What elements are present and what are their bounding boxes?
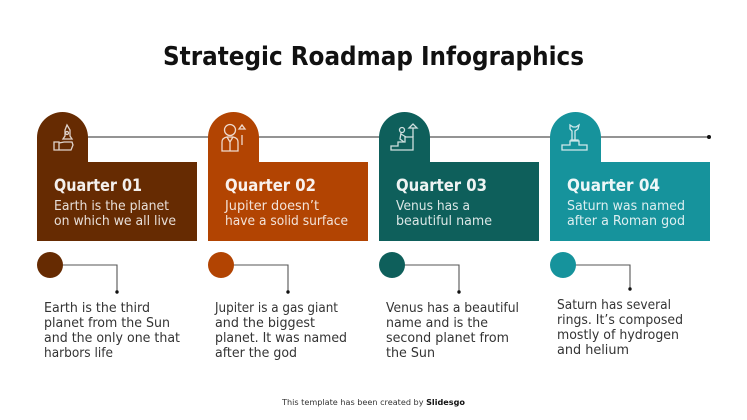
text block: jupiter: and the biggest [215, 315, 315, 331]
description: Earth is the planet [54, 198, 169, 214]
text block: earth: harbors life [44, 345, 113, 361]
description: after a Roman god [567, 213, 685, 229]
text block: saturn: mostly of hydrogen [557, 327, 679, 343]
text block: jupiter: Jupiter is a gas giant [214, 300, 338, 316]
description: have a solid surface [225, 213, 348, 229]
connector: quarter 04 [550, 252, 632, 291]
heading: Quarter 04 [567, 176, 660, 196]
text block: earth: planet from the Sun [44, 315, 170, 331]
description: on which we all live [54, 213, 176, 229]
panel: quarter 01 [37, 112, 197, 241]
panel: quarter 03 [379, 112, 539, 241]
panel: quarter 02 [208, 112, 368, 241]
footer credit: This template has been created by Slidesgo [281, 398, 466, 407]
description [396, 198, 492, 229]
text block: jupiter: after the god [215, 345, 297, 361]
text block: venus: the Sun [386, 345, 435, 361]
text block: earth: and the only one that [44, 330, 180, 346]
description: Venus has a [396, 198, 470, 214]
text block: venus: second planet from [386, 330, 509, 346]
connector: quarter 03 [379, 252, 461, 294]
timeline line [85, 135, 711, 139]
text block: venus: name and is the [386, 315, 488, 331]
text block: saturn: Saturn has several [557, 297, 671, 313]
text block: saturn: and helium [557, 342, 629, 358]
text block: jupiter: planet. It was named [215, 330, 347, 346]
text block: venus [386, 300, 519, 361]
text block: venus: Venus has a beautiful [386, 300, 519, 316]
text block: jupiter [214, 300, 347, 361]
description [54, 198, 176, 229]
icon: businessman with arrow [222, 124, 245, 151]
title: Strategic Roadmap Infographics [163, 42, 584, 72]
icon: trophy podium [562, 125, 587, 150]
description: Jupiter doesn’t [224, 198, 319, 214]
icon: hand holding rocket [54, 125, 73, 150]
text block: saturn [557, 297, 683, 358]
text block: saturn: rings. It’s composed [557, 312, 683, 328]
text block: earth [44, 300, 180, 361]
icon: climbing steps [391, 124, 417, 150]
text block: earth: Earth is the third [44, 300, 150, 316]
description [567, 198, 685, 229]
panel: quarter 04 [550, 112, 710, 241]
description: Saturn was named [567, 198, 685, 214]
description [224, 198, 348, 229]
heading: Quarter 02 [225, 176, 316, 196]
heading: Quarter 03 [396, 176, 487, 196]
heading: Quarter 01 [54, 176, 142, 196]
connector: quarter 01 [37, 252, 119, 294]
connector: quarter 02 [208, 252, 290, 294]
description: beautiful name [396, 213, 492, 229]
